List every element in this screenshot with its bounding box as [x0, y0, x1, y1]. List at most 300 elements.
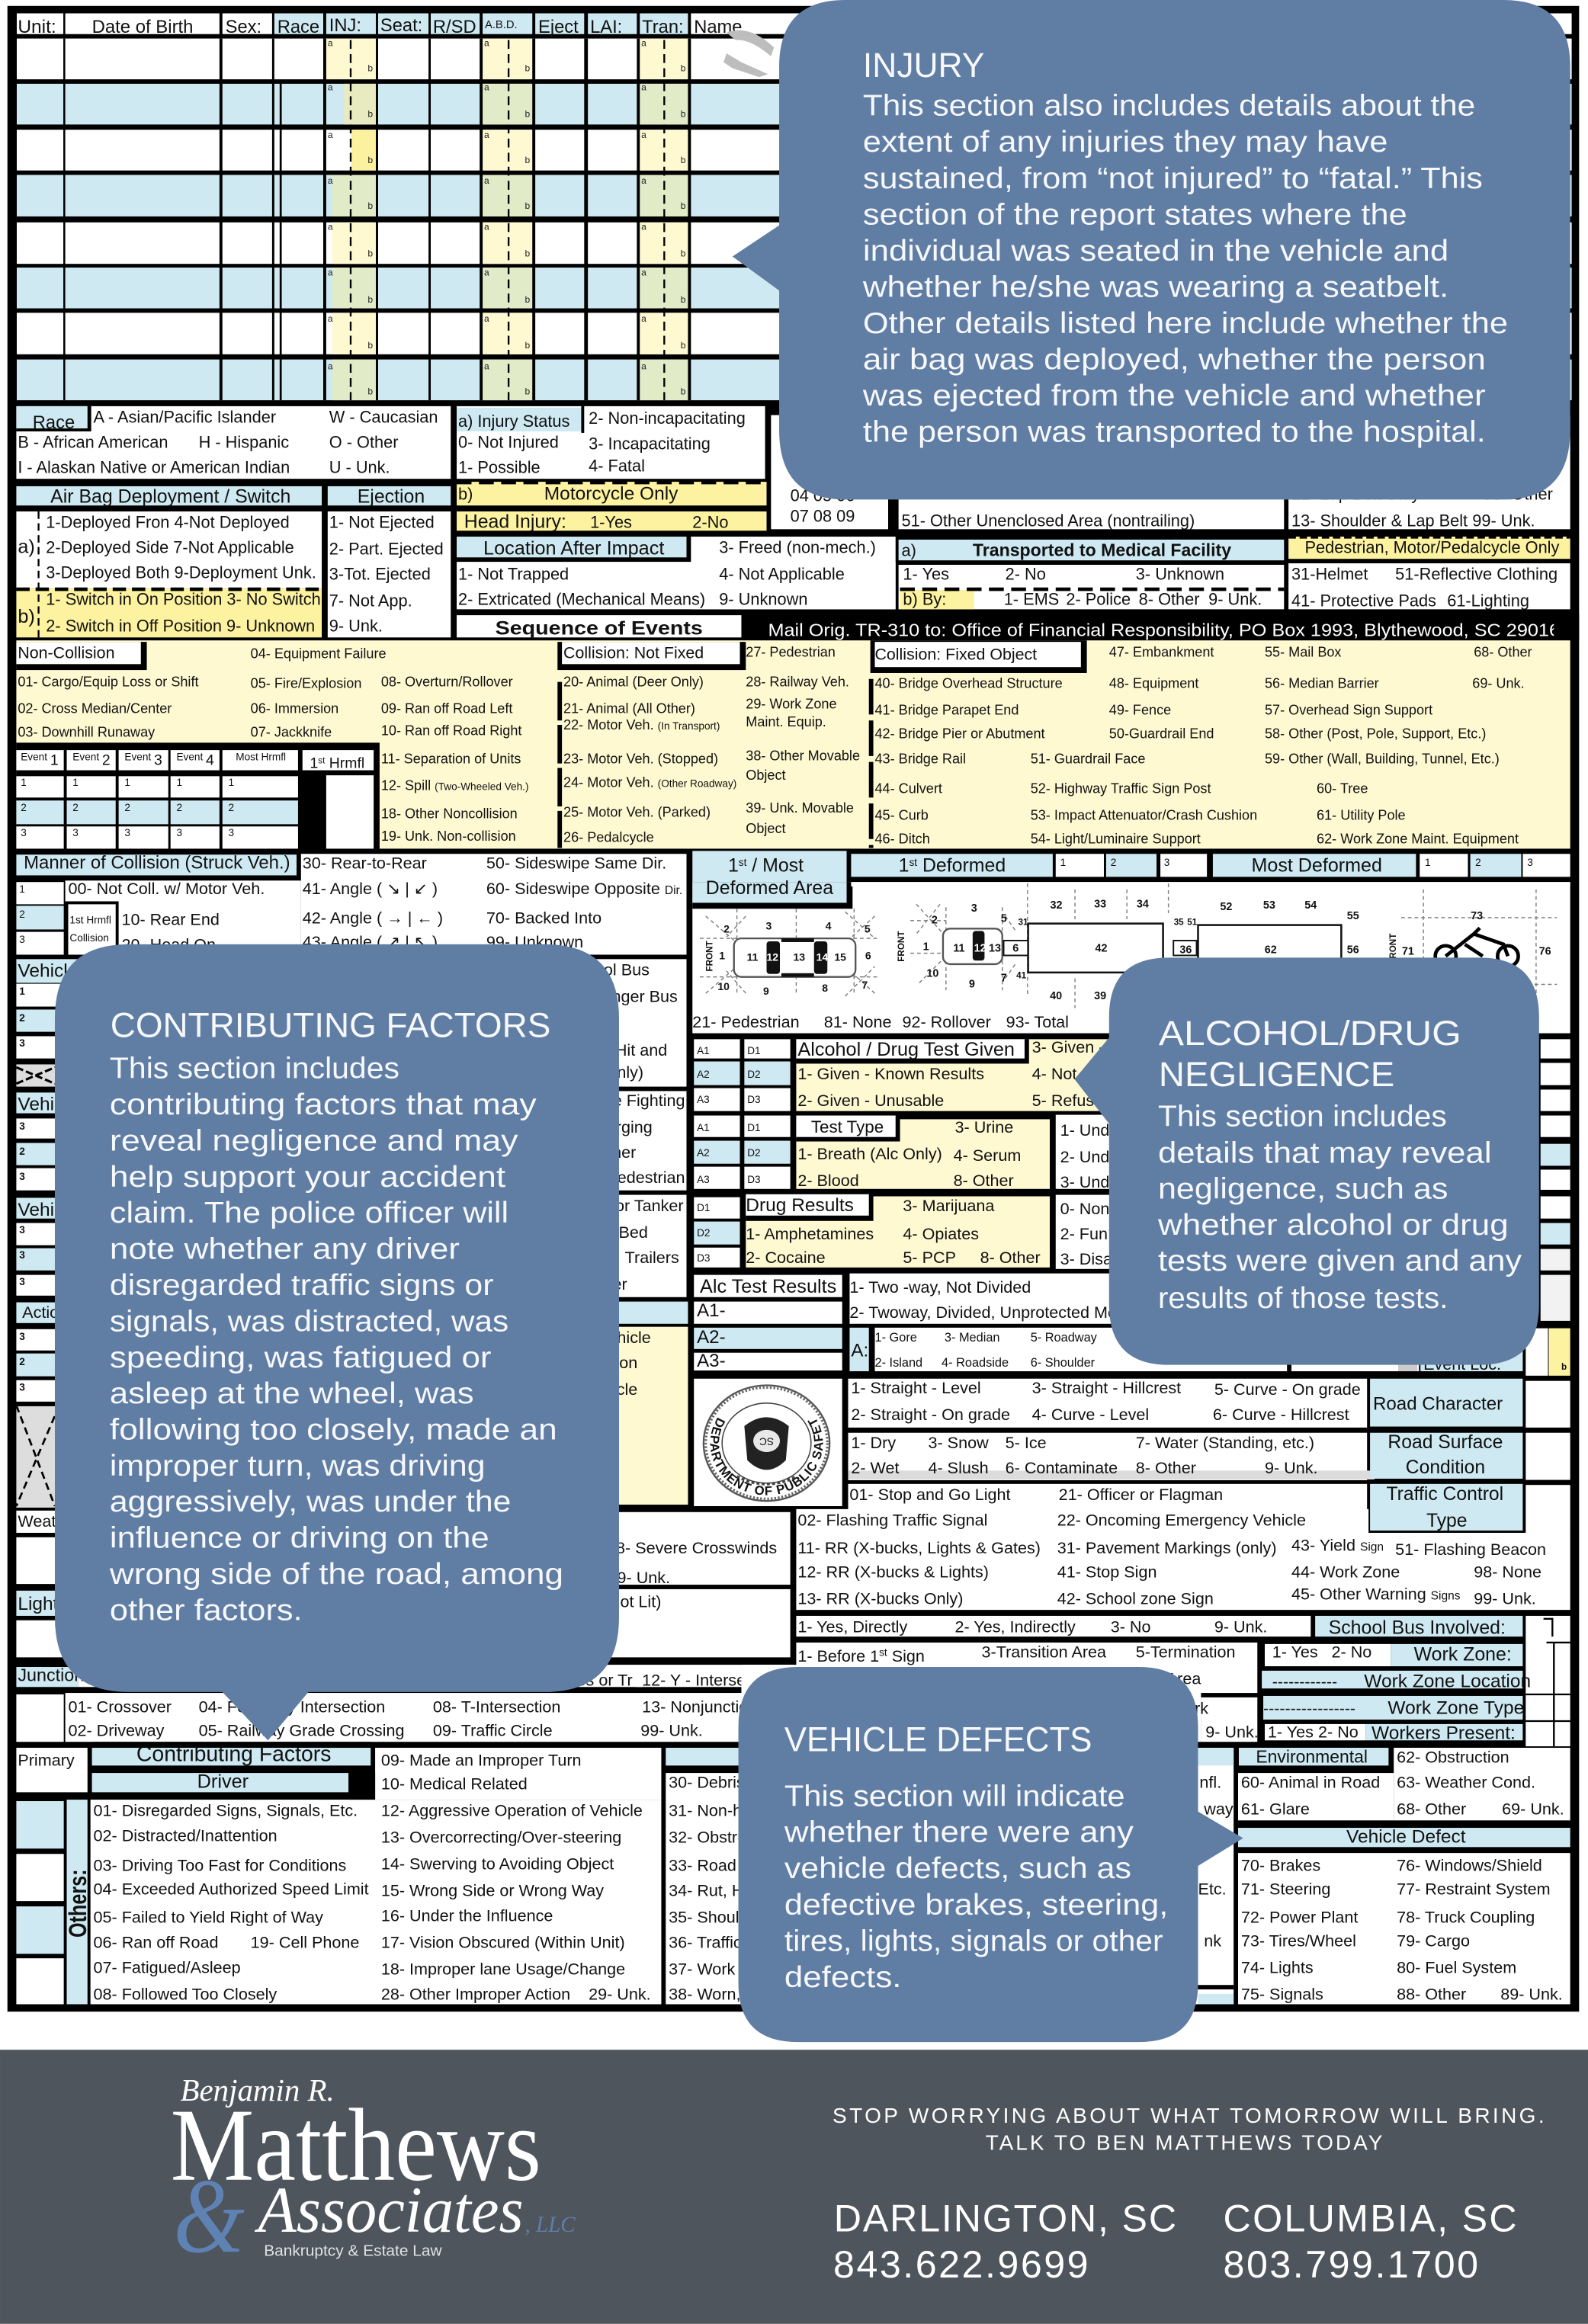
panel: roadway codes: 44- Work Zone	[1291, 1562, 1400, 1581]
panel: seat position and restraint legends: 41- Protective Pads	[1291, 591, 1436, 610]
panel: roadway codes: 9- Unk.	[1265, 1458, 1318, 1477]
panel: location after impact legend: Location After Impact	[483, 537, 664, 559]
panel: contributing factors table: 19- Cell Phone	[251, 1933, 359, 1952]
collision fixed object: 56- Median Barrier	[1265, 675, 1379, 691]
panel: roadway codes: 4- Curve - Level	[1032, 1405, 1149, 1424]
icon: truck and trailer diagram: 5	[1001, 913, 1007, 925]
collision not fixed: 20- Animal (Deer Only)	[563, 674, 704, 689]
a and b cell markers: b	[525, 155, 531, 165]
collision fixed object	[871, 640, 1532, 848]
panel: alcohol and drug test codes: 5- Refused	[1032, 1091, 1112, 1110]
panel: seat position and restraint legends: Pedestrian, Motor/Pedalcycle Only	[1305, 537, 1560, 556]
collision fixed object: 61- Utility Pole	[1317, 808, 1406, 823]
panel: event table: Event	[176, 752, 203, 763]
callout: contributing factors: CONTRIBUTING FACTORS	[111, 1005, 550, 1044]
panel: contributing factors table: 17- Vision Obscured (Within Unit)	[381, 1933, 625, 1952]
callout: injury: This section also includes details about the	[863, 90, 1475, 123]
panel: environmental and vehicle defect codes: 77- Restraint System	[1397, 1880, 1551, 1899]
panel: work zone codes: Sign	[887, 1646, 925, 1665]
panel: junction codes: 01- Crossover	[68, 1697, 172, 1716]
panel: environmental and vehicle defect codes: 79- Cargo	[1397, 1931, 1470, 1951]
callout: injury: whether he/she was wearing a seatbelt.	[862, 271, 1448, 303]
panel: work zone codes: 3- No	[1111, 1617, 1150, 1636]
panel: deformed area headers: 2	[1111, 857, 1116, 868]
a and b cell markers: b	[525, 294, 531, 305]
panel: mid form codes beside the contributing factors callout: 8- Severe Crosswinds	[616, 1538, 777, 1557]
panel: contributing factors table: 14- Swerving to Avoiding Object	[381, 1854, 614, 1874]
panel: work zone codes: 2- Yes, Indirectly	[955, 1617, 1076, 1636]
panel: alcohol and drug test codes: 8- Other	[954, 1171, 1014, 1190]
panel: contributing factors table: 13- Overcorrecting/Over-steering	[381, 1827, 621, 1846]
panel: junction codes: Junction	[18, 1665, 84, 1685]
callout: injury: section of the report states where the	[863, 198, 1407, 231]
panel: environmental and vehicle defect codes: 71- Steering	[1241, 1880, 1330, 1899]
callout: contributing factors: other factors.	[110, 1594, 303, 1627]
a and b cell markers: b	[681, 109, 686, 120]
panel: manner of collision: 50- Sideswipe Same Dir.	[486, 854, 666, 873]
collision fixed object: 54- Light/Luminaire Support	[1031, 832, 1201, 847]
callout: contributing factors: note whether any driver	[110, 1233, 460, 1266]
panel: vehicle diagrams	[692, 877, 1570, 1034]
panel: race legend: H - Hispanic	[199, 432, 289, 451]
panel: transported to medical facility	[899, 540, 1284, 609]
callout: contributing factors: signals, was distracted, was	[110, 1305, 508, 1338]
panel: work zone codes: Workers Present:	[1371, 1723, 1516, 1743]
callout: injury: air bag was deployed, whether the person	[863, 343, 1486, 376]
callout: contributing factors: influence or driving on the	[110, 1522, 489, 1555]
collision fixed object: 41- Bridge Parapet End	[874, 702, 1019, 717]
icon: car diagram	[700, 909, 879, 997]
callout: contributing factors: claim. The police officer will	[110, 1197, 508, 1229]
a and b cell markers: b	[367, 155, 373, 165]
panel: manner of collision: 20- Head On	[121, 935, 216, 954]
panel: event table: 1	[50, 752, 59, 769]
panel: alcohol and drug test codes: D2	[747, 1069, 761, 1080]
panel: injury status legend: a) Injury Status	[458, 412, 569, 431]
panel: environmental and vehicle defect codes: nk	[1204, 1931, 1221, 1951]
damage labels: 92- Rollover	[902, 1012, 991, 1031]
panel: alcohol and drug test codes: 8- Other	[980, 1248, 1041, 1267]
panel: environmental and vehicle defect codes: 73- Tires/Wheel	[1241, 1931, 1356, 1951]
panel: location after impact legend: 4- Not Applicable	[719, 564, 845, 583]
callout: injury: INJURY	[863, 46, 984, 85]
panel: transported to medical facility: 1- Yes	[903, 564, 949, 583]
collision not fixed: 38- Other Movable	[746, 748, 860, 764]
panel: transported to medical facility: b) By:	[903, 590, 946, 609]
panel: sequence of events codes: 18- Other Noncollision	[381, 806, 518, 822]
panel: junction codes	[16, 1665, 794, 1742]
table column headings: R/SD	[433, 18, 476, 37]
panel: alcohol and drug test codes: A3-	[697, 1351, 726, 1371]
icon: car diagram: FRONT	[705, 941, 715, 972]
panel: alcohol and drug test codes: A1	[697, 1045, 710, 1056]
panel: alcohol and drug test codes: Drug Results	[746, 1195, 854, 1216]
damage labels: 93- Total	[1006, 1012, 1069, 1031]
panel: roadway codes	[796, 1274, 1570, 1610]
panel: manner of collision: 10- Rear End	[121, 910, 220, 929]
panel: manner of collision: Collision	[69, 932, 109, 944]
callout: contributing factors: following too closely, made an	[110, 1413, 557, 1446]
a and b cell markers: b	[681, 248, 686, 258]
panel: air bag deployment legend: 3-Deployed Both 9-Deployment Unk.	[46, 563, 316, 582]
callout: contributing factors	[55, 944, 619, 1740]
table column headings: Eject	[538, 18, 579, 37]
collision not fixed: 23- Motor Veh. (Stopped)	[563, 752, 718, 767]
panel: mid form codes beside the contributing factors callout: Vehicle	[585, 1380, 637, 1399]
a and b cell markers: a	[641, 82, 646, 93]
icon: truck and trailer diagram: 32	[1051, 899, 1063, 912]
panel: alcohol and drug test codes: D2	[697, 1227, 711, 1239]
panel: event table: Event	[124, 752, 151, 763]
panel: vehicle columns on the left edge: Vehicle	[18, 1200, 78, 1220]
panel: junction codes: 12- Y - Intersection	[642, 1670, 781, 1689]
logo: Benjamin R. Matthews and Associates	[171, 2073, 576, 2275]
panel: roadway codes: 51- Flashing Beacon	[1395, 1540, 1546, 1559]
icon: truck and trailer diagram: 62	[1265, 944, 1277, 957]
panel: event table: 3	[124, 827, 130, 838]
panel: alcohol and drug test codes: D1	[747, 1045, 761, 1056]
panel: deformed area headers	[692, 851, 1570, 902]
panel: alcohol and drug test codes: 3- Marijuana	[903, 1196, 994, 1215]
panel: deformed area headers: 1	[1425, 857, 1431, 868]
panel: transported to medical facility: 2- No	[1006, 564, 1046, 583]
panel: vehicle columns on the left edge: 3	[19, 1331, 25, 1342]
panel: alcohol and drug test codes: 5- PCP	[903, 1248, 956, 1267]
panel: roadway codes: b	[1561, 1362, 1567, 1372]
panel: contributing factors table	[16, 1742, 755, 2004]
panel: work zone codes: 9- Unk.	[1214, 1617, 1267, 1636]
collision fixed object: 68- Other	[1474, 645, 1532, 660]
callout: injury: Other details listed here include whether the	[863, 307, 1508, 340]
contact: Columbia office: COLUMBIA, SC	[1224, 2197, 1517, 2239]
panel: seat position and restraint legends: 13- Shoulder & Lap Belt	[1291, 511, 1468, 530]
panel: alcohol and drug test codes: D3	[747, 1094, 761, 1105]
icon: truck and trailer diagram: 34	[1137, 898, 1149, 910]
panel: event table: 1	[310, 755, 318, 771]
panel: alcohol and drug test codes: 0- Non	[1060, 1199, 1109, 1218]
icon: motorcycle diagram: 73	[1471, 910, 1483, 922]
panel: vehicle columns on the left edge: Vehicle	[18, 961, 78, 982]
panel: roadway codes: 11- RR (X-bucks, Lights & Gates)	[797, 1538, 1041, 1557]
call to action: STOP WORRYING ABOUT WHAT TOMORROW WILL BRING.	[832, 2104, 1545, 2127]
panel: injury status legend: 1- Possible	[458, 457, 541, 476]
icon: truck and trailer diagram: 52	[1220, 901, 1232, 913]
icon: truck and trailer diagram: 12	[974, 943, 986, 955]
panel: race legend: W - Caucasian	[329, 407, 438, 426]
panel: race legend: I - Alaskan Native or American Indian	[18, 457, 290, 476]
icon: department of public safety seal: DEPARTMENT OF PUBLIC SAFETY	[710, 1418, 823, 1495]
panel: vehicle columns on the left edge: Action	[22, 1303, 68, 1322]
icon: truck and trailer diagram: 7	[1001, 973, 1007, 985]
panel: contributing factors table: 09- Made an Improper Turn	[381, 1750, 582, 1769]
panel: alcohol and drug test codes: Alcohol / Drug Test Given	[797, 1039, 1015, 1060]
a and b cell markers: a	[328, 313, 333, 324]
panel: roadway codes: 01- Stop and Go Light	[849, 1485, 1011, 1504]
icon: car diagram: 9	[763, 985, 769, 997]
panel: air bag deployment legend: b)	[18, 606, 35, 627]
panel: environmental and vehicle defect codes: 75- Signals	[1241, 1985, 1323, 2004]
panel: work zone codes: 3-Work	[1156, 1698, 1208, 1717]
panel: injury status legend: 4- Fatal	[589, 456, 645, 475]
panel: mid form codes beside the contributing factors callout: Only)	[605, 1063, 643, 1082]
collision not fixed: 29- Work Zone	[746, 697, 837, 712]
logo: Benjamin R. Matthews and Associates: , LLC	[525, 2213, 576, 2237]
icon: car diagram: 12	[767, 950, 778, 963]
a and b cell markers: a	[641, 361, 646, 371]
table column headings: Race	[277, 18, 319, 37]
icon: car diagram: 1	[719, 949, 725, 961]
panel: road character labels: Road Character	[1373, 1394, 1503, 1415]
panel: environmental and vehicle defect codes: Etc.	[1198, 1880, 1227, 1899]
panel: sequence of events codes: 07- Jackknife	[251, 725, 332, 740]
callout: vehicle defects: This section will indicate	[784, 1780, 1125, 1813]
contact: Darlington office: 843.622.9699	[833, 2243, 1089, 2286]
collision not fixed: 25- Motor Veh. (Parked)	[563, 805, 711, 820]
panel: roadway codes: 6- Contaminate	[1006, 1458, 1118, 1477]
panel: injury status legend: 0- Not Injured	[458, 432, 559, 451]
callout: alcohol drug negligence: tests were given and any	[1158, 1245, 1522, 1277]
a and b cell markers: a	[484, 82, 489, 93]
panel: alcohol and drug test codes: A2	[697, 1147, 710, 1159]
panel: roadway codes: 2- Straight - On grade	[851, 1405, 1010, 1424]
panel: roadway codes: 5- Roadway	[1031, 1331, 1098, 1345]
panel: junction codes: es or Tr	[577, 1670, 633, 1689]
panel: work zone codes: 3-Transition Area	[982, 1642, 1106, 1661]
panel: roadway codes: 1- Dry	[851, 1433, 896, 1452]
panel: vehicle columns on the left edge: 3	[19, 1249, 25, 1261]
icon: department of public safety seal: SC	[759, 1436, 774, 1447]
panel: contributing factors table: 10- Medical Related	[381, 1774, 528, 1793]
table column headings: Sex:	[226, 18, 261, 37]
panel: deformed area headers: Deformed	[917, 855, 1006, 877]
panel: vehicle columns on the left edge: 2	[19, 1356, 25, 1367]
panel: contributing factors table: 01- Disregarded Signs, Signals, Etc.	[94, 1800, 358, 1819]
logo: Benjamin R. Matthews and Associates: Bankruptcy & Estate Law	[264, 2243, 442, 2260]
panel: environmental and vehicle defect codes: 74- Lights	[1241, 1958, 1314, 1977]
panel: right edge cells	[1541, 1039, 1570, 1321]
panel: work zone codes: Work Zone Location	[1364, 1671, 1531, 1691]
panel: environmental and vehicle defect codes: 88- Other	[1397, 1985, 1466, 2004]
panel: environmental and vehicle defect codes: nfl.	[1199, 1773, 1221, 1792]
panel: mid form codes beside the contributing factors callout: 9- Unk.	[618, 1568, 670, 1587]
icon: truck and trailer diagram: 2	[932, 915, 938, 927]
panel: sequence of events codes: 19- Unk. Non-collision	[381, 829, 516, 844]
panel: location after impact legend: 3- Freed (non-mech.)	[719, 537, 876, 556]
icon: truck and trailer diagram: 35	[1174, 918, 1184, 928]
panel: roadway codes: 5- Curve - On grade	[1214, 1380, 1361, 1399]
panel: event table: Hrmfl	[325, 755, 364, 771]
collision fixed object: 59- Other (Wall, Building, Tunnel, Etc.)	[1265, 752, 1500, 767]
a and b cell markers: a	[328, 175, 333, 186]
panel: seat position and restraint legends: 31-Helmet	[1291, 564, 1368, 583]
panel: injury status legend: b)	[458, 484, 473, 503]
panel: contributing factors table: Others:	[64, 1870, 91, 1938]
collision fixed object: 62- Work Zone Maint. Equipment	[1317, 832, 1519, 847]
panel: alcohol and drug test codes: A1	[697, 1122, 710, 1133]
panel: vehicle columns on the left edge: Vehicle	[18, 1095, 78, 1115]
callout: vehicle defects: defective brakes, steering,	[784, 1889, 1168, 1922]
panel: vehicle columns on the left edge: 3	[19, 1381, 25, 1393]
a and b cell markers: a	[328, 268, 333, 278]
panel: work zone codes: School Bus Involved:	[1329, 1617, 1506, 1638]
panel: environmental and vehicle defect codes: 62- Obstruction	[1397, 1747, 1509, 1766]
panel: injury status legend: 3- Incapacitating	[589, 434, 711, 453]
callout: injury: the person was transported to the hospital.	[863, 416, 1486, 449]
a and b cell markers: b	[681, 200, 686, 211]
table column headings: LAI:	[590, 18, 622, 37]
panel: seat position and restraint legends: 51-Reflective Clothing	[1395, 564, 1558, 583]
callout: vehicle defects: defects.	[784, 1961, 902, 1994]
panel: roadway codes: 13- RR (X-bucks Only)	[797, 1588, 963, 1608]
panel: alcohol and drug test codes: A1-	[697, 1300, 726, 1321]
panel: transported to medical facility: 9- Unk.	[1208, 590, 1262, 609]
callout: contributing factors: help support your accident	[110, 1161, 505, 1194]
panel: contributing factors table: 34- Rut, H	[669, 1881, 744, 1900]
panel: event table: 3	[176, 827, 182, 838]
callout: contributing factors: asleep at the wheel, was	[110, 1377, 474, 1410]
panel: ejection legend: 7- Not App.	[329, 591, 412, 610]
panel: alcohol and drug test codes: 2- Given - Unusable	[797, 1091, 944, 1110]
panel: contributing factors table: 16- Under the Influence	[381, 1906, 553, 1925]
panel: mid form codes beside the contributing factors callout: Other	[586, 1274, 627, 1293]
panel: roadway codes: 4- Slush	[929, 1458, 989, 1477]
heading: sequence of events	[457, 615, 741, 639]
panel: vehicle columns on the left edge: 3	[19, 1276, 25, 1287]
panel: work zone codes: 1- Before 1	[797, 1646, 879, 1665]
contact: Darlington office	[833, 2197, 1176, 2286]
panel: road character labels: Road Surface	[1387, 1432, 1503, 1453]
panel: contributing factors table: 31- Non-h	[669, 1800, 742, 1819]
panel: environmental and vehicle defect codes: Vehicle Defect	[1346, 1826, 1466, 1847]
a and b cell markers: a	[328, 130, 333, 140]
panel: injury status legend	[457, 406, 767, 532]
panel: alcohol and drug test codes: A2	[697, 1069, 710, 1080]
panel: transported to medical facility: 2- Police	[1066, 590, 1131, 609]
panel: work zone codes: 5-Termination	[1136, 1642, 1236, 1661]
a and b cell markers: b	[367, 63, 373, 73]
collision fixed object: 57- Overhead Sign Support	[1265, 702, 1432, 717]
panel: deformed area headers: st	[909, 857, 917, 868]
panel: transported to medical facility: 8- Other	[1139, 590, 1200, 609]
panel: environmental and vehicle defect codes: 61- Glare	[1241, 1800, 1310, 1819]
panel: alcohol and drug test codes	[694, 1037, 1211, 1371]
a and b cell markers: a	[328, 82, 333, 93]
a and b cell markers: a	[328, 221, 333, 232]
panel: manner of collision: 41- Angle ( ↘ | ↙ )	[303, 879, 438, 898]
panel: alcohol and drug test codes: D1	[697, 1202, 711, 1213]
contact: Darlington office: DARLINGTON, SC	[834, 2197, 1176, 2239]
icon: car diagram: 3	[766, 919, 772, 931]
collision fixed object: 52- Highway Traffic Sign Post	[1031, 781, 1211, 797]
collision fixed object: 48- Equipment	[1109, 675, 1198, 691]
panel: deformed area headers: 3	[1527, 857, 1533, 868]
panel: environmental and vehicle defect codes: 80- Fuel System	[1397, 1958, 1516, 1977]
icon: car diagram: 15	[834, 950, 846, 963]
damage labels: 81- None	[824, 1012, 892, 1031]
panel: roadway codes: 3- Snow	[929, 1433, 989, 1452]
collision fixed object: 55- Mail Box	[1265, 645, 1341, 660]
icon: truck and trailer diagram: 41	[1016, 971, 1027, 981]
collision not fixed: Object	[746, 821, 786, 836]
panel: roadway codes: 41- Stop Sign	[1057, 1562, 1157, 1581]
panel: contributing factors table: 04- Exceeded Authorized Speed Limit	[94, 1880, 369, 1899]
panel: transported to medical facility: 1- EMS	[1004, 590, 1059, 609]
callout: alcohol drug negligence	[1074, 957, 1539, 1365]
panel: vehicle columns on the left edge: 2	[19, 1012, 25, 1024]
panel: alcohol and drug test codes: 1- Amphetamines	[746, 1224, 874, 1243]
panel: alcohol and drug test codes: 4- Opiates	[903, 1224, 979, 1243]
a and b cell markers: b	[367, 200, 373, 211]
panel: roadway codes: 8- Other	[1136, 1458, 1196, 1477]
panel: environmental and vehicle defect codes	[741, 1746, 1570, 2004]
panel: mid form codes beside the contributing factors callout: Vehicle	[598, 1328, 651, 1347]
icon: motorcycle diagram: FRONT	[1388, 934, 1398, 964]
panel: seat position and restraint legends	[771, 415, 1570, 610]
panel: vehicle columns on the left edge: 3	[19, 1171, 25, 1182]
panel: mid form codes beside the contributing factors callout: Emerging	[582, 1117, 653, 1136]
icon: truck and trailer diagram: FRONT	[897, 931, 906, 962]
panel: deformed area headers: 3	[1164, 857, 1169, 868]
panel: event table: 1	[176, 777, 182, 788]
panel: junction codes: 99- Unk.	[640, 1720, 703, 1739]
panel: work zone codes: Work Zone Type	[1387, 1697, 1524, 1718]
panel: contributing factors table: 29- Unk.	[589, 1985, 651, 2004]
damage labels	[692, 1012, 1069, 1031]
panel: vehicle columns on the left edge: Weather	[18, 1511, 80, 1531]
panel: event table: 1	[72, 777, 79, 788]
icon: motorcycle diagram	[1388, 890, 1557, 1008]
icon: car diagram: 14	[816, 950, 828, 963]
collision fixed object: 49- Fence	[1109, 702, 1171, 717]
contact: Columbia office: 803.799.1700	[1224, 2243, 1478, 2286]
panel: seat position and restraint legends: 12- Lap Belt Only	[1291, 484, 1420, 503]
panel: race legend: B - African American	[18, 432, 168, 451]
a and b cell markers: b	[681, 294, 686, 305]
mailing instructions bar	[768, 614, 1579, 640]
panel: contributing factors table: 37- Work	[669, 1960, 736, 1979]
panel: race legend: A - Asian/Pacific Islander	[94, 407, 276, 426]
panel: alcohol and drug test codes: D3	[747, 1174, 761, 1185]
collision fixed object: 44- Culvert	[874, 781, 942, 797]
panel: road character labels	[1370, 1379, 1570, 1533]
panel: event table: 2	[176, 802, 182, 813]
icon: truck and trailer diagram: 53	[1263, 899, 1275, 912]
collision not fixed: 28- Railway Veh.	[746, 674, 849, 689]
collision fixed object: 40- Bridge Overhead Structure	[874, 675, 1063, 691]
table column headings: Date of Birth	[92, 17, 193, 37]
a and b cell markers: b	[681, 340, 686, 351]
panel: injury status legend: 2- Non-incapacitating	[589, 409, 746, 428]
a and b cell markers: b	[525, 109, 531, 120]
panel: sequence of events codes: 08- Overturn/Rollover	[381, 674, 513, 689]
panel: mid form codes beside the contributing factors callout: Pedestrian	[606, 1168, 685, 1187]
panel: vehicle columns on the left edge: 1	[19, 986, 25, 997]
icon: car diagram: 5	[865, 922, 871, 934]
a and b cell markers: a	[484, 268, 489, 278]
panel: roadway codes: 6- Curve - Hillcrest	[1213, 1405, 1349, 1424]
panel: vehicle diagrams: Deformed Area	[706, 877, 833, 899]
panel: alcohol and drug test codes: 3- Given - Contaminated	[1032, 1037, 1211, 1056]
panel: contributing factors table: 03- Driving Too Fast for Conditions	[94, 1855, 347, 1874]
panel: injury status legend: Head Injury:	[464, 511, 566, 532]
collision not fixed: Object	[746, 768, 786, 783]
panel: vehicle columns on the left edge: 3	[19, 1120, 25, 1132]
collision not fixed: 21- Animal (All Other)	[563, 700, 695, 716]
call to action: TALK TO BEN MATTHEWS TODAY	[986, 2130, 1383, 2154]
icon: truck and trailer diagram: 1	[923, 941, 929, 954]
a and b cell markers: b	[525, 248, 531, 258]
panel: mid form codes beside the contributing factors callout: Other	[595, 1143, 636, 1162]
